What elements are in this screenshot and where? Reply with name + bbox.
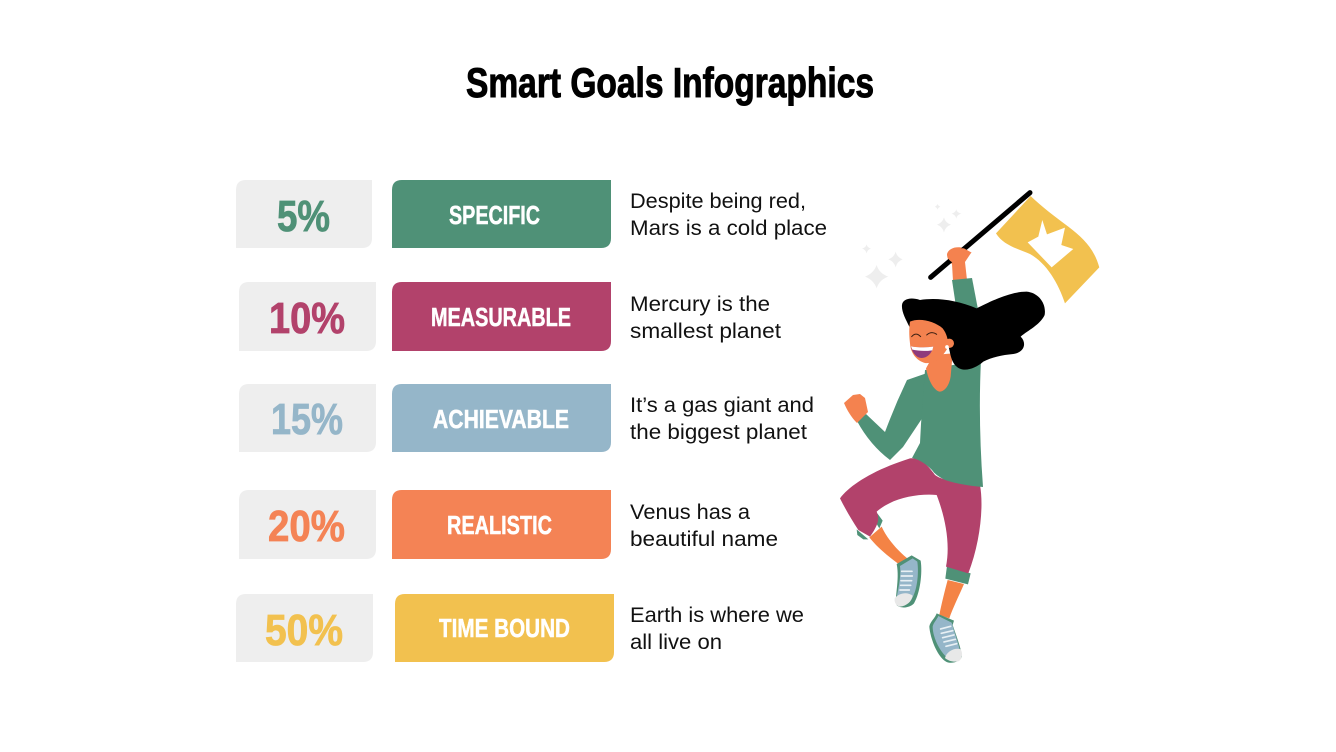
icon: crown [1028, 220, 1073, 267]
label: specific: SPECIFIC [449, 200, 540, 230]
fist [844, 394, 868, 423]
percent box: 15%: 15% [271, 395, 343, 444]
label: time bound: TIME BOUND [439, 613, 570, 643]
description: measurable: smallest planet [630, 319, 781, 343]
label: measurable: MEASURABLE [431, 302, 571, 332]
description: specific: Despite being red, [630, 189, 806, 213]
forearm and hand [947, 247, 971, 281]
label: realistic [392, 490, 611, 559]
torso [912, 360, 983, 487]
shoe: upper [895, 555, 921, 607]
flag pole [931, 193, 1030, 277]
title: Smart Goals Infographics [466, 59, 874, 106]
row: achievable [239, 384, 814, 452]
pants [840, 458, 981, 573]
percent box: 10%: 10% [269, 294, 345, 343]
label: measurable [392, 282, 611, 351]
label: realistic: REALISTIC [447, 510, 552, 540]
illustration: woman with flag [840, 193, 1099, 663]
left arm sleeve [857, 372, 930, 460]
description: measurable: Mercury is the [630, 292, 770, 316]
percent box: 5% [236, 180, 372, 248]
neck and chest [926, 353, 953, 392]
label: specific [392, 180, 611, 248]
label: achievable: ACHIEVABLE [433, 404, 569, 434]
percent box: 20% [239, 490, 376, 559]
hair [902, 292, 1045, 370]
raised hand fingers [947, 248, 972, 263]
description: achievable: the biggest planet [630, 420, 807, 444]
percent box: 5%: 5% [277, 192, 330, 241]
flag [996, 196, 1099, 303]
description: specific: Mars is a cold place [630, 216, 827, 240]
label: time bound [395, 594, 614, 662]
label: achievable [392, 384, 611, 452]
row: time bound [236, 594, 804, 662]
cuffs [857, 513, 883, 539]
row: measurable [239, 282, 781, 351]
percent box: 50% [236, 594, 373, 662]
head group [902, 193, 1045, 392]
raised sleeve [952, 278, 980, 320]
description: time bound: all live on [630, 630, 722, 654]
eyes [912, 333, 937, 337]
row: realistic [239, 490, 778, 559]
shoe: lower [929, 613, 962, 663]
raised arm [947, 247, 980, 320]
percent box: 10% [239, 282, 376, 351]
percent box: 20%: 20% [268, 502, 345, 551]
description: time bound: Earth is where we [630, 603, 804, 627]
ear [945, 339, 954, 348]
sparkles [862, 204, 961, 288]
face [909, 320, 948, 363]
percent box: 50%: 50% [265, 606, 343, 655]
description: achievable: It’s a gas giant and [630, 393, 814, 417]
percent box: 15% [239, 384, 376, 452]
description: realistic: beautiful name [630, 527, 778, 551]
description: realistic: Venus has a [630, 500, 750, 524]
row: specific [236, 180, 827, 248]
legs and shoes [840, 458, 981, 663]
mouth [911, 346, 933, 358]
